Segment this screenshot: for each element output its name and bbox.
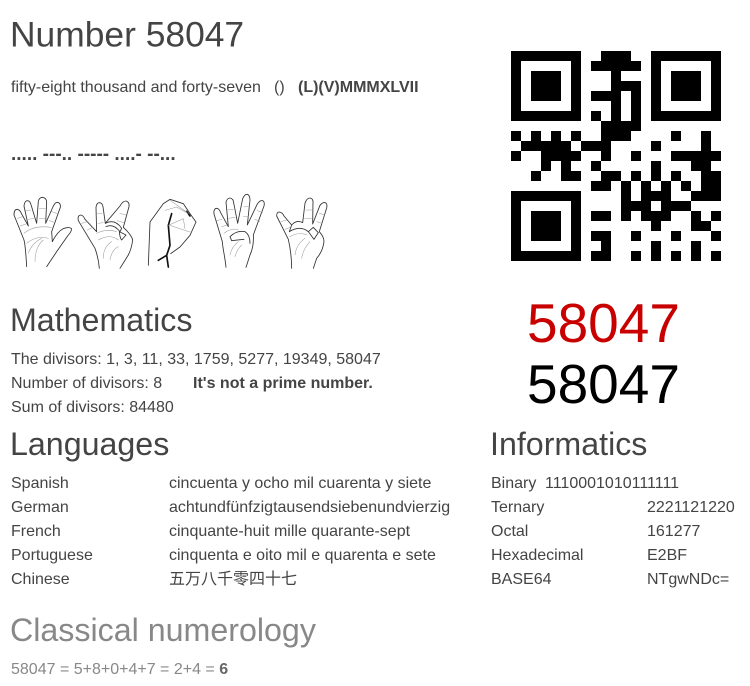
languages table: Chinese <box>11 571 70 588</box>
languages table <box>11 475 450 588</box>
languages table: 五万八千零四十七 <box>169 570 297 588</box>
morse code: ..... ---.. ----- ....- --... <box>11 144 176 165</box>
mathematics facts: It's not a prime number. <box>193 375 373 392</box>
languages table: cinquante-huit mille quarante-sept <box>169 523 411 540</box>
number in words and roman numeral: fifty-eight thousand and forty-seven <box>11 79 261 96</box>
icon: hand digit 0 <box>148 199 196 267</box>
languages table: cincuenta y ocho mil cuarenta y siete <box>169 475 431 492</box>
icon: hand digit 4 <box>214 194 264 267</box>
informatics table: BASE64 <box>491 571 552 588</box>
informatics heading: Informatics <box>490 426 647 462</box>
icon: hand digit 8 <box>78 201 133 268</box>
languages table: cinquenta e oito mil e quarenta e sete <box>169 547 436 564</box>
informatics table: Binary <box>491 475 536 492</box>
mathematics facts: The divisors: 1, 3, 11, 33, 1759, 5277, 19349, 58047 <box>11 351 381 368</box>
QR code <box>511 51 721 261</box>
languages table: Portuguese <box>11 547 93 564</box>
number in words and roman numeral: () <box>274 79 285 96</box>
icon: hand digit 7 <box>277 198 327 268</box>
icon: hand digit 5 <box>14 197 71 267</box>
mathematics facts <box>11 351 381 416</box>
languages table: achtundfünfzigtausendsiebenundvierzig <box>169 499 450 516</box>
informatics table: Hexadecimal <box>491 547 583 564</box>
number in words and roman numeral: (L)(V)MMMXLVII <box>298 79 419 96</box>
languages heading: Languages <box>10 426 169 462</box>
informatics table: 2221121220 <box>647 499 735 516</box>
informatics table: 161277 <box>647 523 700 540</box>
languages table: German <box>11 499 69 516</box>
informatics table: Ternary <box>491 499 544 516</box>
mathematics facts: Number of divisors: 8 <box>11 375 162 392</box>
informatics table: 1110001010111111 <box>545 475 679 492</box>
mathematics heading: Mathematics <box>10 302 192 338</box>
informatics table: NTgwNDc= <box>647 571 729 588</box>
classical numerology heading: Classical numerology <box>10 612 317 648</box>
informatics table <box>491 475 735 588</box>
mathematics facts: Sum of divisors: 84480 <box>11 399 174 416</box>
informatics table: Octal <box>491 523 528 540</box>
informatics table: E2BF <box>647 547 687 564</box>
number in words and roman numeral <box>11 79 419 96</box>
sign language hands <box>14 194 327 268</box>
numerology calculation: 58047 = 5+8+0+4+7 = 2+4 = 6 <box>11 661 228 678</box>
large number red: 58047 <box>527 292 680 354</box>
languages table: French <box>11 523 61 540</box>
title: Number 58047 <box>10 14 244 54</box>
large number black: 58047 <box>527 353 680 415</box>
languages table: Spanish <box>11 475 69 492</box>
